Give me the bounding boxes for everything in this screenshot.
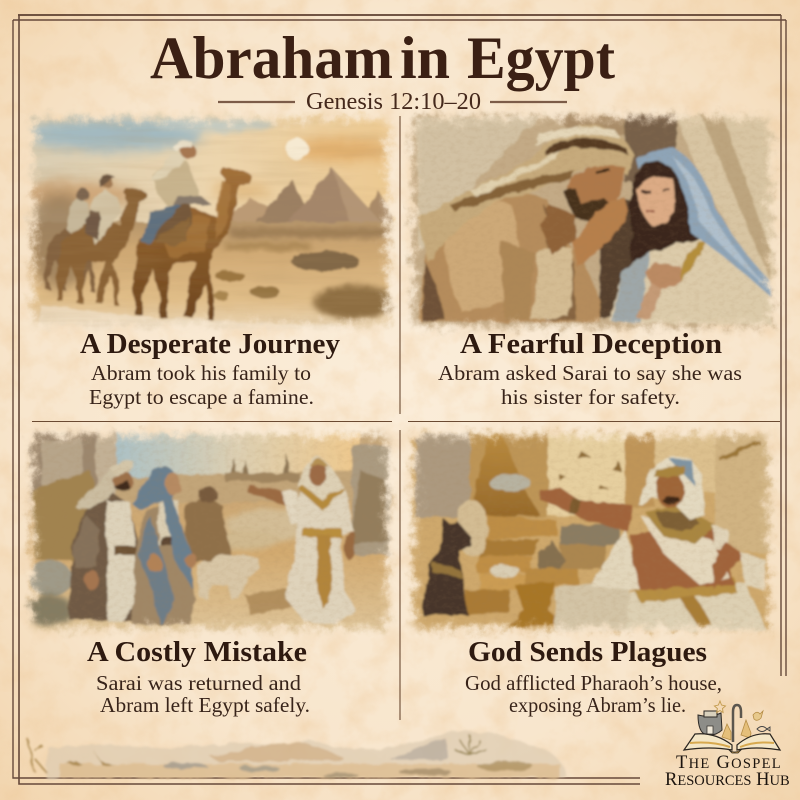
illustration: Pharaoh's official sends them away [20,425,400,640]
icon: figures [722,720,751,740]
sheep [197,554,260,600]
body text: Abram left Egypt safely. [100,693,310,717]
title: Egypt [467,25,615,91]
middle camel [56,188,148,305]
title: in [400,25,450,91]
official [247,486,285,505]
Sarai dress [610,238,772,325]
heading: God Sends Plagues [468,637,707,668]
illustration: Abram whispering to Sarai [403,105,788,340]
icon: ark [698,711,722,735]
heading: A Fearful Deception [460,329,722,360]
body text: Abram asked Sarai to say she was [438,361,742,385]
lead camel [133,167,252,320]
pharaoh cape and drape [590,530,640,590]
panel: god sends plagues [403,425,783,717]
body text: Egypt to escape a famine. [89,385,314,409]
panel: a fearful deception [403,105,788,409]
veil [637,149,772,298]
illustration: camels and pyramids [24,110,396,330]
rear camel [42,228,96,294]
paint texture [403,425,783,640]
Sarai face [636,176,675,226]
Sarai hand [645,262,682,290]
heading: A Costly Mistake [87,637,307,668]
Abram [68,490,140,622]
title: Abraham [150,25,393,91]
panel: a costly mistake [20,425,400,717]
pharaoh collar [645,505,715,544]
pharaoh lap and skirt [552,582,631,632]
paint texture [108,440,348,622]
icon: shepherd's staff [733,705,741,742]
illustration: Pharaoh amid treasures [403,425,783,640]
body text: God afflicted Pharaoh’s house, [465,671,722,695]
body text: his sister for safety. [501,385,680,409]
body text: exposing Abram’s lie. [509,693,686,717]
Abram robe [418,184,600,322]
pharaoh head [638,456,705,520]
paint texture [40,121,316,322]
body text: Sarai was returned and [96,671,302,695]
Abram hand [572,197,627,268]
Abram headcloth [418,124,634,262]
rider [152,160,198,205]
rear rider [67,188,90,240]
body text: Abram took his family to [91,361,311,385]
logo: The Gospel Resources Hub [665,701,790,790]
logo wordmark: RESOURCES HUB [665,770,790,790]
Sarai [132,500,195,625]
pharaoh arm [540,488,632,532]
middle rider [84,176,122,245]
altar tower and steps [472,435,540,518]
logo wordmark: THE GOSPEL [676,753,782,773]
seated man [184,499,232,562]
dog statue [422,518,472,615]
subtitle with rules: Genesis 12:10–20 [306,89,481,115]
paint texture [483,128,764,319]
icon: star, dove and fish [714,701,770,732]
illustration: desert strip at the bottom [27,731,568,778]
pharaoh torso [630,525,735,590]
icon: open book [684,734,780,753]
Sarai hair [628,160,700,262]
heading: A Desperate Journey [80,329,340,360]
panel: a desperate journey [0,105,400,409]
Abram face and beard [566,164,626,206]
